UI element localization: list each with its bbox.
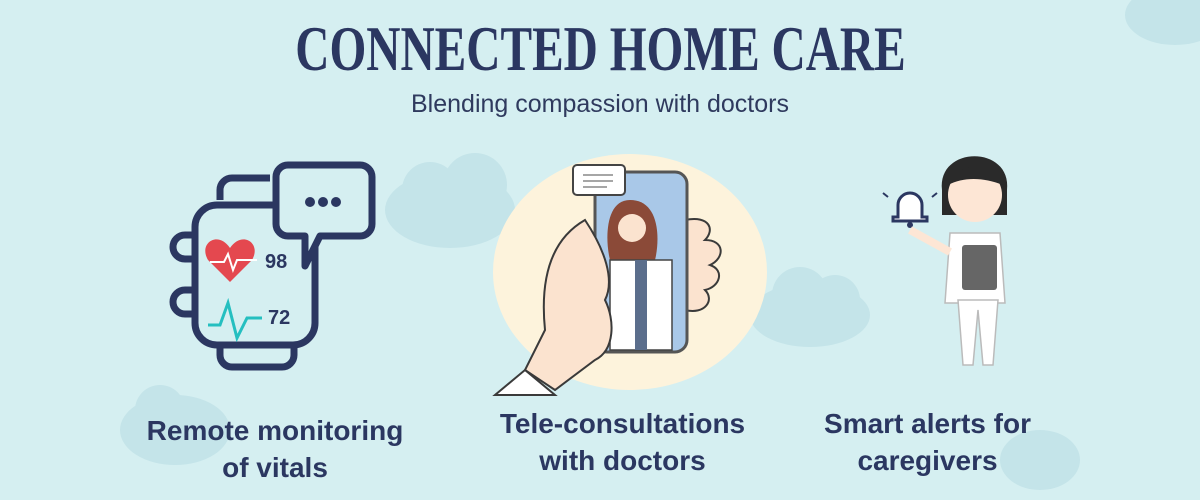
title: CONNECTED HOME CARE (295, 13, 905, 84)
icon: nurse with bell (882, 156, 1008, 366)
subtitle: Blending compassion with doctors (411, 90, 789, 118)
label: smart alerts (824, 408, 1031, 476)
label: tele-consultations: Tele-consultations (500, 408, 745, 439)
label: remote monitoring: Remote monitoring (147, 415, 403, 446)
label: smart alerts: Smart alerts for (824, 408, 1031, 439)
icon: teleconsultation phone (492, 154, 767, 396)
icon: smartwatch with vitals: 98 (265, 251, 287, 273)
label: smart alerts: caregivers (857, 445, 998, 476)
icon: smartwatch with vitals (170, 162, 376, 370)
icon: smartwatch with vitals: 72 (268, 307, 290, 329)
label: remote monitoring: of vitals (222, 452, 328, 483)
label: remote monitoring (147, 415, 403, 483)
label: tele-consultations (500, 408, 745, 476)
label: tele-consultations: with doctors (539, 445, 706, 476)
